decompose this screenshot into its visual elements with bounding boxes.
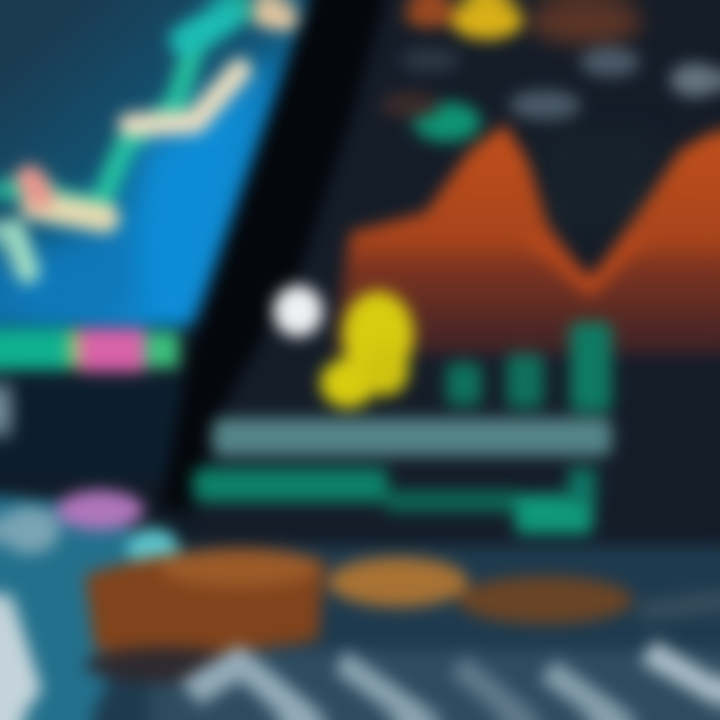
- pink and cyan bokeh: [56, 490, 179, 568]
- coin shadow: [85, 647, 245, 683]
- orange area chart: [332, 124, 720, 355]
- left white key: [0, 592, 42, 720]
- lower desk lighter area: [150, 650, 720, 720]
- right valley dark area: [545, 130, 655, 230]
- green data band: [193, 468, 596, 534]
- right coin: [457, 576, 633, 624]
- black diagonal gap between screens: [160, 0, 385, 510]
- orange ridge line: [530, 235, 640, 288]
- screen glow: [120, 60, 280, 318]
- dark lower bezel of left screen: [0, 378, 185, 478]
- panel: left screen: [0, 0, 310, 325]
- green candle bars: [446, 322, 612, 412]
- left light area: [0, 495, 165, 720]
- yellow coins: [320, 291, 414, 408]
- panel: keyboard desk: [0, 495, 720, 720]
- top coloured blobs: [404, 0, 643, 142]
- copper coins: [85, 548, 633, 683]
- grey clouds: [380, 47, 720, 120]
- colour strip on left screen: [0, 328, 179, 372]
- middle coin: [328, 557, 468, 607]
- grey-teal data band: [212, 418, 612, 456]
- upper left key highlights: [0, 506, 60, 554]
- keyboard keys: [180, 590, 720, 720]
- panel: right screen: [195, 0, 720, 540]
- yellow top blob: [451, 0, 523, 40]
- bezel pale spot: [0, 380, 12, 440]
- green marker: [413, 102, 481, 142]
- coin highlight: [160, 548, 320, 588]
- white dot: [273, 285, 323, 337]
- screen lower-left glow: [0, 228, 140, 318]
- left screen line chart: [12, 12, 285, 272]
